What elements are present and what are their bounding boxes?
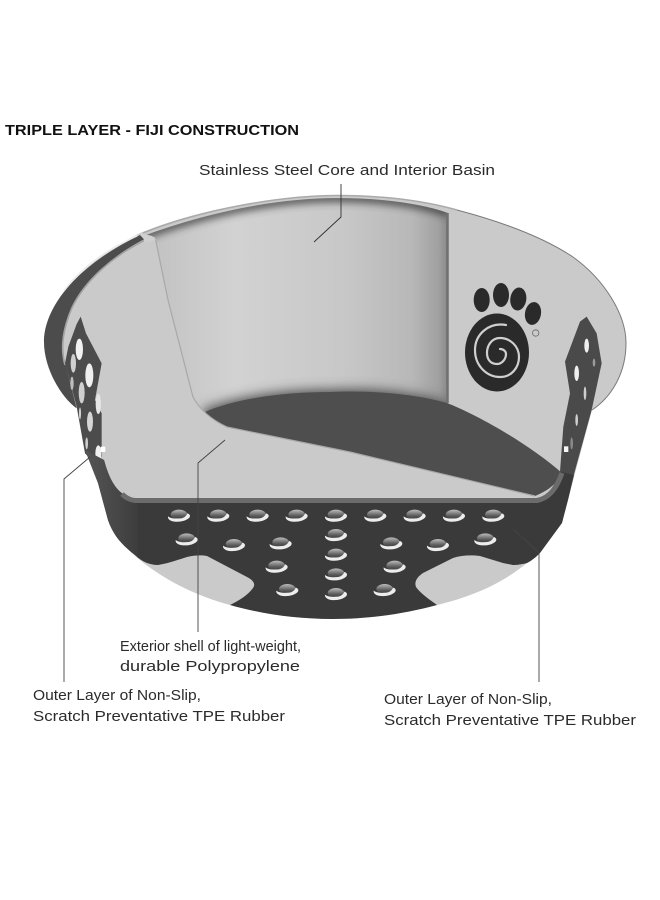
- left rubber panel shape: [65, 317, 102, 458]
- label: polypropylene shell: Exterior shell of light-weight,: [120, 639, 301, 655]
- label: polypropylene shell: durable Polypropylene: [120, 659, 300, 675]
- right rubber panel: [560, 317, 602, 477]
- label: left TPE rubber: Outer Layer of Non-Slip,: [33, 688, 201, 704]
- interior shading: [146, 198, 448, 412]
- leader: left TPE: [64, 457, 90, 682]
- cut tab of core at rim: [135, 233, 156, 243]
- left corner shading: [85, 450, 138, 557]
- label: stainless steel core: Stainless Steel Core and Interior Basin: [199, 162, 495, 179]
- left panel holes: [70, 339, 105, 461]
- rim inner edge: [63, 241, 144, 365]
- rim highlight: [64, 236, 137, 291]
- cut edge of steel core: [155, 237, 535, 496]
- icon: paw logo: [465, 283, 543, 392]
- left rubber panel and rim: [44, 235, 144, 461]
- label: right TPE rubber: Outer Layer of Non-Slip,: [384, 692, 552, 708]
- band holes: [168, 510, 504, 600]
- lower dark rubber band: [85, 450, 574, 619]
- leader: stainless steel: [314, 184, 341, 242]
- leader: polypropylene: [198, 440, 225, 632]
- right lip edge: [457, 210, 626, 410]
- label: left TPE rubber: Scratch Preventative TPE Rubber: [33, 709, 285, 725]
- basin floor: [205, 391, 562, 496]
- top rim highlight: [143, 196, 457, 233]
- right panel shape: [560, 317, 602, 477]
- interior basin wall: [143, 198, 448, 452]
- infographic canvas: [5, 125, 636, 725]
- right panel holes: [564, 339, 595, 452]
- left rim crescent: [44, 235, 144, 408]
- label: right TPE rubber: Scratch Preventative TPE Rubber: [384, 713, 636, 729]
- title: TRIPLE LAYER - FIJI CONSTRUCTION: [5, 123, 299, 139]
- gray band top edge: [122, 473, 562, 500]
- interior vertical seam: [446, 213, 449, 403]
- bowl illustration: [44, 195, 626, 619]
- bowl silhouette: polypropylene shell: [44, 195, 626, 619]
- floor shadow blur: [199, 380, 446, 412]
- leader: right TPE: [513, 529, 539, 682]
- top rim shadow: [143, 198, 448, 236]
